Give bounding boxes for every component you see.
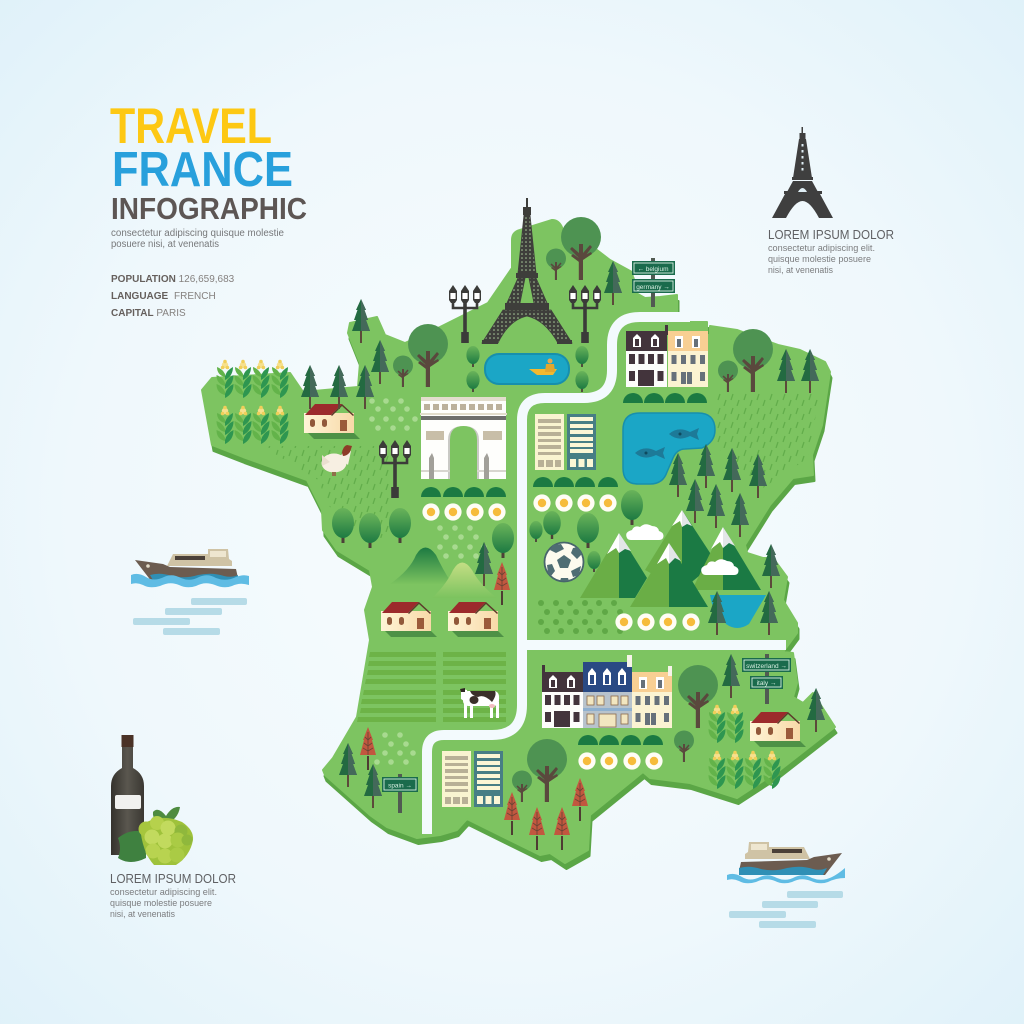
sign: spain xyxy=(382,774,418,813)
text: lorem bottom left: nisi, at venenatis xyxy=(110,909,175,920)
text: lorem bottom left: LOREM IPSUM DOLOR xyxy=(110,872,236,886)
farm houses xyxy=(304,404,806,747)
text: lorem bottom left: consectetur adipiscing elit. xyxy=(110,887,217,898)
country facts: CAPITAL PARIS xyxy=(111,308,186,319)
subtitle text xyxy=(111,228,284,250)
sign: belgium and germany xyxy=(632,258,675,307)
football xyxy=(544,542,584,582)
town houses south xyxy=(542,655,672,728)
subtitle text: posuere nisi, at venenatis xyxy=(111,239,219,250)
text: lorem top right: nisi, at venenatis xyxy=(768,265,833,276)
crop field stripes xyxy=(357,652,506,722)
daisies xyxy=(422,494,700,770)
icon: wine bottle xyxy=(111,735,144,855)
text: lorem top right xyxy=(768,228,894,276)
sign: belgium and germany: germany → xyxy=(636,284,670,291)
roads xyxy=(427,317,786,834)
sign: belgium and germany: ← belgium xyxy=(637,266,669,273)
mountains xyxy=(580,510,761,607)
eiffel tower xyxy=(482,198,572,344)
arc de triomphe xyxy=(420,397,507,479)
bushes xyxy=(421,393,707,745)
oval trees xyxy=(332,346,643,572)
map top face xyxy=(202,220,835,863)
country facts: POPULATION 126,659,683 xyxy=(111,274,235,285)
street lamps xyxy=(379,285,601,498)
lake with rowing boat xyxy=(484,353,570,385)
icon: eiffel tower xyxy=(772,127,833,218)
title: infographic: INFOGRAPHIC xyxy=(111,191,307,226)
blue house xyxy=(583,655,632,728)
hatched meadows xyxy=(262,392,820,540)
mountain lake xyxy=(710,595,766,628)
office buildings xyxy=(442,414,596,807)
corn rows xyxy=(216,360,780,789)
hills xyxy=(390,548,497,598)
chicken xyxy=(322,445,352,476)
town houses north xyxy=(626,325,708,387)
map side depth xyxy=(204,226,836,869)
round trees xyxy=(393,217,773,802)
sign: switzerland and italy: switzerland → xyxy=(746,663,787,670)
cow xyxy=(460,688,499,718)
water bars east xyxy=(729,891,843,928)
sign: switzerland and italy: italy → xyxy=(757,680,776,687)
pine trees xyxy=(301,261,825,808)
map of france xyxy=(202,198,836,869)
text: lorem top right: consectetur adipiscing elit. xyxy=(768,243,875,254)
country facts: LANGUAGE FRENCH xyxy=(111,291,216,302)
subtitle text: consectetur adipiscing quisque molestie xyxy=(111,228,284,239)
text: lorem bottom left: quisque molestie posuere xyxy=(110,898,212,909)
text: lorem top right: LOREM IPSUM DOLOR xyxy=(768,228,894,242)
red autumn trees xyxy=(360,562,588,850)
text: lorem top right: quisque molestie posuere xyxy=(768,254,871,265)
title: travel: TRAVEL xyxy=(110,98,272,154)
sign: switzerland and italy xyxy=(742,654,791,704)
boat east xyxy=(727,842,845,883)
dark dots xyxy=(538,600,623,634)
sign: spain: spain → xyxy=(388,782,412,790)
pale dots xyxy=(369,398,487,765)
icon: grapes xyxy=(118,807,193,865)
title: france: FRANCE xyxy=(112,143,293,197)
boat west xyxy=(131,549,249,587)
text: lorem bottom left xyxy=(110,872,236,920)
lake with fish xyxy=(623,413,715,484)
water bars west xyxy=(133,598,247,635)
country facts xyxy=(111,274,235,319)
title block xyxy=(110,98,307,319)
